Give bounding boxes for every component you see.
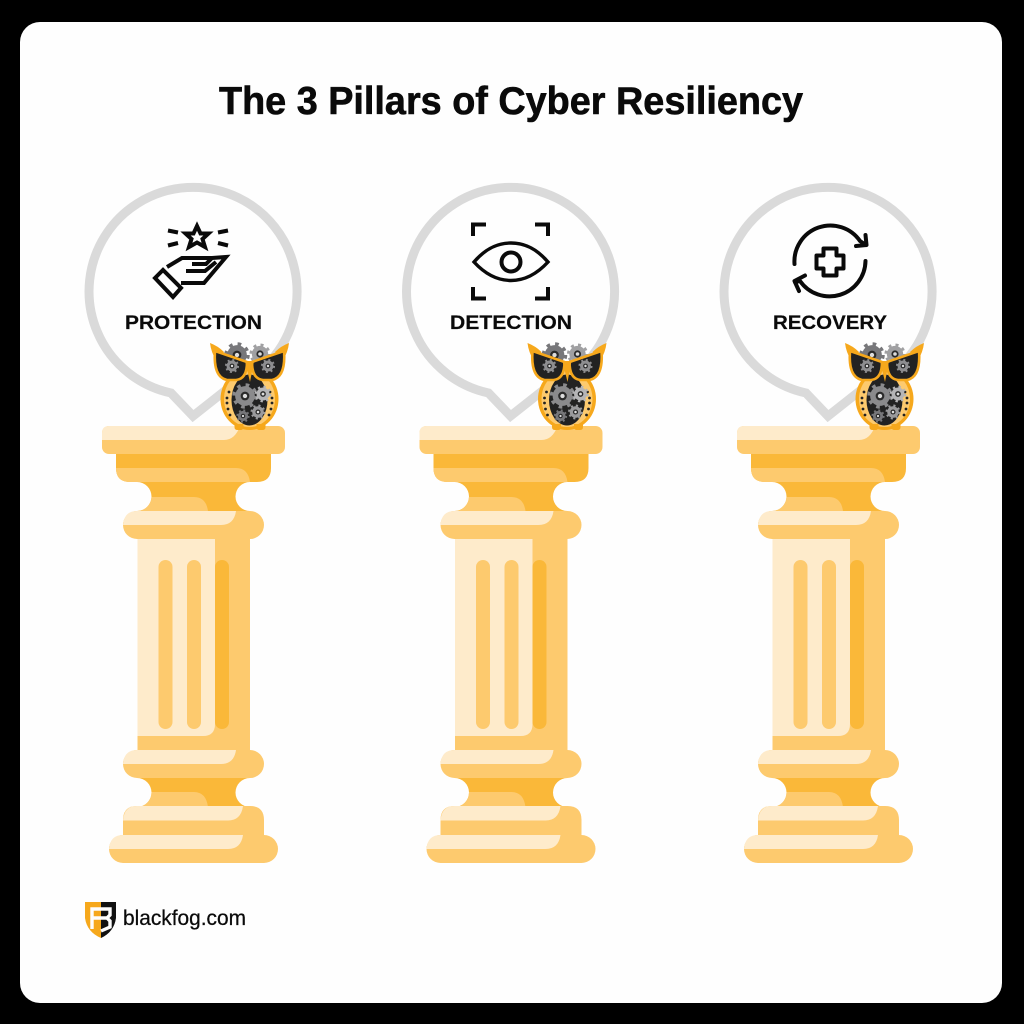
speech bubble: detection: [407, 187, 615, 416]
pillar: recovery: [737, 426, 920, 863]
pillar: protection: [102, 426, 285, 863]
label: protection: PROTECTION: [125, 312, 262, 334]
icon: hand holding star: [155, 226, 228, 297]
icon: eye in viewfinder: [473, 224, 548, 298]
label: recovery: RECOVERY: [773, 312, 887, 334]
panel: detection: [407, 187, 615, 416]
owl: recovery: [845, 343, 924, 430]
title: The 3 Pillars of Cyber Resiliency: [219, 80, 803, 123]
label: detection: DETECTION: [450, 312, 572, 334]
panel: recovery: [724, 187, 932, 416]
panel: protection: [89, 187, 297, 416]
logo: blackfog: [85, 902, 246, 938]
speech bubble: protection: [89, 187, 297, 416]
owl: detection: [528, 343, 606, 430]
owl: protection: [210, 343, 289, 430]
icon: cycle arrows with medical cross: [794, 226, 866, 296]
icon: shield: [85, 902, 116, 938]
brand name: blackfog.com: [123, 907, 246, 930]
pillar: detection: [420, 426, 602, 863]
speech bubble: recovery: [724, 187, 932, 416]
